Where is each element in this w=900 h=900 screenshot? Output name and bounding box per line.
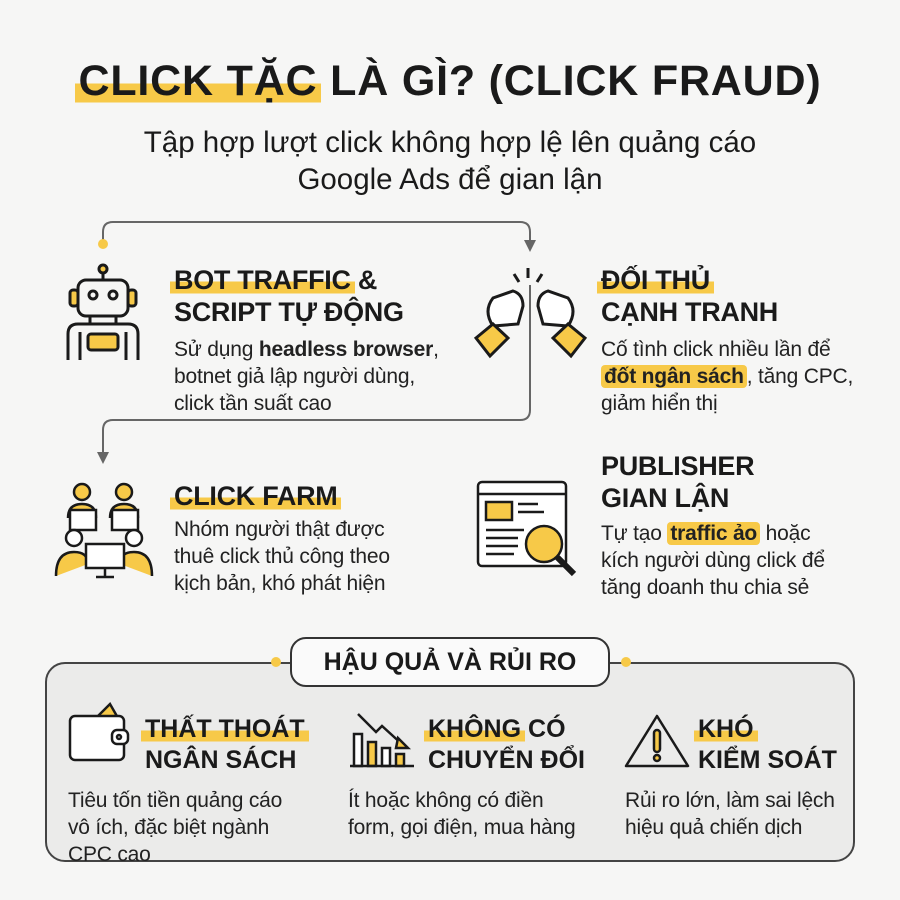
title: CLICK TẶC LÀ GÌ? (CLICK FRAUD) — [79, 57, 821, 105]
section heading pill: HẬU QUẢ VÀ RỦI RO — [324, 648, 576, 676]
panel: competitors: giảm hiển thị — [601, 392, 717, 415]
text: Rủi ro lớn, làm sai lệch — [625, 789, 835, 812]
text: vô ích, đặc biệt ngành — [68, 816, 269, 839]
subtitle: Google Ads để gian lận — [297, 163, 603, 196]
icon: warning triangle — [624, 714, 690, 768]
panel: publisher: GIAN LẬN — [601, 483, 729, 513]
panel: click farm — [170, 481, 390, 595]
panel: click farm: kịch bản, khó phát hiện — [174, 572, 385, 595]
panel: bot traffic: SCRIPT TỰ ĐỘNG — [174, 297, 404, 327]
panel: hard to control: KHÓ — [698, 715, 754, 743]
panel: click farm: Nhóm người thật được — [174, 518, 384, 541]
panel: publisher: kích người dùng click để — [601, 549, 825, 572]
panel: budget loss: NGÂN SÁCH — [145, 746, 296, 774]
panel: no conversions: KHÔNG CÓ — [428, 715, 566, 743]
panel: bot traffic: botnet giả lập người dùng, — [174, 365, 415, 388]
panel: budget loss: THẤT THOÁT — [145, 715, 305, 743]
section heading pill — [290, 637, 610, 687]
panel: publisher: tăng doanh thu chia sẻ — [601, 576, 809, 599]
subtitle: Tập hợp lượt click không hợp lệ lên quảng cáo — [144, 126, 756, 159]
text: hiệu quả chiến dịch — [625, 816, 802, 839]
panel: bot traffic: click tần suất cao — [174, 392, 331, 415]
icon: browser with magnifier — [476, 480, 576, 576]
panel: bot traffic — [170, 265, 439, 415]
panel: click farm: thuê click thủ công theo — [174, 545, 390, 568]
panel: publisher — [601, 451, 825, 599]
icon: robot — [66, 264, 140, 360]
text: Ít hoặc không có điền — [348, 789, 543, 812]
panel: publisher: PUBLISHER — [601, 451, 754, 481]
panel: competitors: đốt ngân sách, tăng CPC, — [604, 365, 853, 388]
text: CPC cao — [68, 843, 151, 866]
text: Tiêu tốn tiền quảng cáo — [68, 789, 282, 812]
panel: hard to control: KIỂM SOÁT — [698, 746, 837, 774]
panel: competitors: Cố tình click nhiều lần để — [601, 338, 830, 361]
panel: click farm: CLICK FARM — [174, 481, 337, 511]
panel: no conversions — [424, 714, 585, 774]
panel: budget loss — [141, 714, 309, 774]
consequences box — [45, 662, 855, 862]
panel: competitors — [597, 265, 853, 415]
panel: bot traffic: Sử dụng headless browser, — [174, 338, 439, 361]
panel: competitors: ĐỐI THỦ — [601, 265, 710, 295]
text: form, gọi điện, mua hàng — [348, 816, 576, 839]
subtitle — [144, 126, 756, 196]
icon: fist bump — [474, 268, 587, 358]
panel: competitors: CẠNH TRANH — [601, 297, 778, 327]
panel: no conversions: CHUYỂN ĐỔI — [428, 746, 585, 774]
icon: wallet — [68, 702, 130, 762]
panel: bot traffic: BOT TRAFFIC & — [174, 265, 377, 295]
icon: click farm people — [54, 482, 154, 578]
icon: declining bar chart — [350, 713, 414, 768]
panel: publisher: Tự tạo traffic ảo hoặc — [601, 522, 810, 545]
panel: hard to control — [694, 714, 837, 774]
